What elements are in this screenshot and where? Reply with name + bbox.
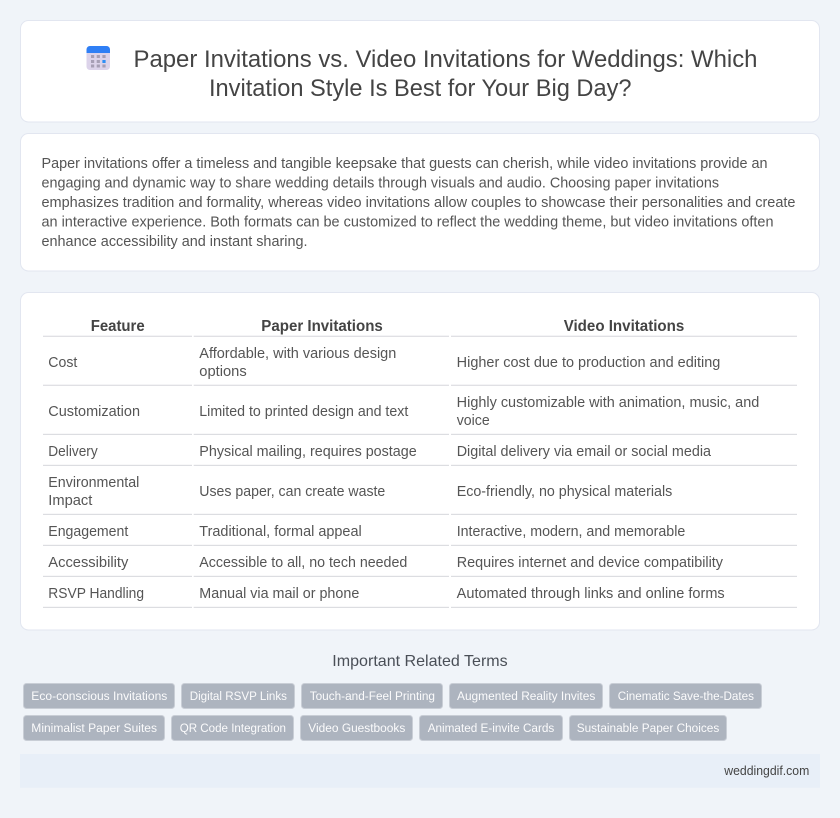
text block: introduction paragraph: Paper invitations offer a timeless and tangible keepsake that guests can cherish, while video invitations provide an (42, 156, 768, 172)
text block: introduction paragraph (42, 156, 796, 250)
row: RSVP handling (48, 586, 725, 602)
footer (20, 754, 820, 788)
title (134, 46, 758, 102)
row: RSVP handling: RSVP Handling (48, 586, 144, 602)
row: accessibility (48, 555, 724, 571)
row: engagement: Interactive, modern, and memorable (457, 524, 685, 540)
row: customization: voice (457, 413, 490, 429)
row: cost (48, 346, 720, 380)
row: RSVP handling: Manual via mail or phone (199, 586, 359, 602)
table header row (91, 318, 684, 335)
tag: Minimalist Paper Suites (31, 721, 157, 735)
title: Paper Invitations vs. Video Invitations for Weddings: Which (134, 46, 758, 73)
tag (300, 716, 412, 740)
row: environmental impact: Eco-friendly, no physical materials (457, 484, 672, 500)
row: accessibility: Requires internet and device compatibility (457, 555, 724, 571)
tag: Cinematic Save-the-Dates (618, 689, 754, 703)
row: accessibility: Accessible to all, no tech needed (199, 555, 407, 571)
row: delivery (48, 444, 711, 460)
row: customization: Customization (48, 404, 140, 420)
row: RSVP handling: Automated through links and online forms (457, 586, 725, 602)
row: cost: Higher cost due to production and editing (457, 355, 720, 371)
tag (570, 716, 726, 740)
icon: calendar (86, 46, 110, 70)
row: cost: Cost (48, 355, 77, 371)
row: customization (48, 395, 759, 429)
panel: title header (20, 20, 820, 122)
tag: Digital RSVP Links (190, 689, 287, 703)
row: customization: Limited to printed design and text (199, 404, 408, 420)
table header row: Video Invitations (564, 318, 684, 335)
row: engagement: Engagement (48, 524, 128, 540)
row: environmental impact: Uses paper, can create waste (199, 484, 385, 500)
text block: introduction paragraph: emphasizes tradition and formality, whereas video invitations allow couples to showcase their personalities and create (42, 195, 796, 211)
tag (450, 684, 602, 708)
footer credit: weddingdif.com (723, 763, 809, 778)
tag: QR Code Integration (180, 721, 286, 735)
row: environmental impact: Impact (48, 493, 92, 509)
text block: introduction paragraph: an interactive experience. Both formats can be customized to reflect the wedding theme, but video invitations often (42, 214, 774, 230)
row: engagement: Traditional, formal appeal (199, 524, 362, 540)
tag (182, 684, 294, 708)
row: cost: Affordable, with various design (199, 346, 396, 362)
tag: Video Guestbooks (308, 721, 405, 735)
row: environmental impact: Environmental (48, 475, 139, 491)
tag: Touch-and-Feel Printing (310, 689, 435, 703)
tag (610, 684, 762, 708)
row: customization: Highly customizable with animation, music, and (457, 395, 759, 411)
tag: Animated E-invite Cards (428, 721, 554, 735)
tag (172, 716, 294, 740)
tag (24, 684, 174, 708)
row: environmental impact (48, 475, 672, 509)
text block: introduction paragraph: engaging and dynamic way to share wedding details through visuals and audio. Choosing paper invitations (42, 176, 719, 192)
row: delivery: Delivery (48, 444, 98, 460)
panel: related term tags (24, 684, 762, 740)
tag (302, 684, 442, 708)
tag (24, 716, 164, 740)
panel: introduction (20, 134, 820, 271)
row: engagement (48, 524, 685, 540)
tag: Augmented Reality Invites (457, 689, 595, 703)
tag (420, 716, 562, 740)
panel: comparison table (20, 292, 820, 630)
heading: important related terms: Important Related Terms (332, 653, 508, 670)
row: cost: options (199, 364, 247, 380)
row: delivery: Physical mailing, requires postage (199, 444, 417, 460)
tag: Eco-conscious Invitations (31, 689, 167, 703)
table header row: Paper Invitations (261, 318, 383, 335)
table header row: Feature (91, 318, 145, 335)
row: accessibility: Accessibility (48, 555, 129, 571)
text block: introduction paragraph: enhance accessibility and instant sharing. (42, 234, 308, 250)
row: delivery: Digital delivery via email or social media (457, 444, 711, 460)
title: Invitation Style Is Best for Your Big Day? (209, 75, 632, 102)
tag: Sustainable Paper Choices (577, 721, 719, 735)
